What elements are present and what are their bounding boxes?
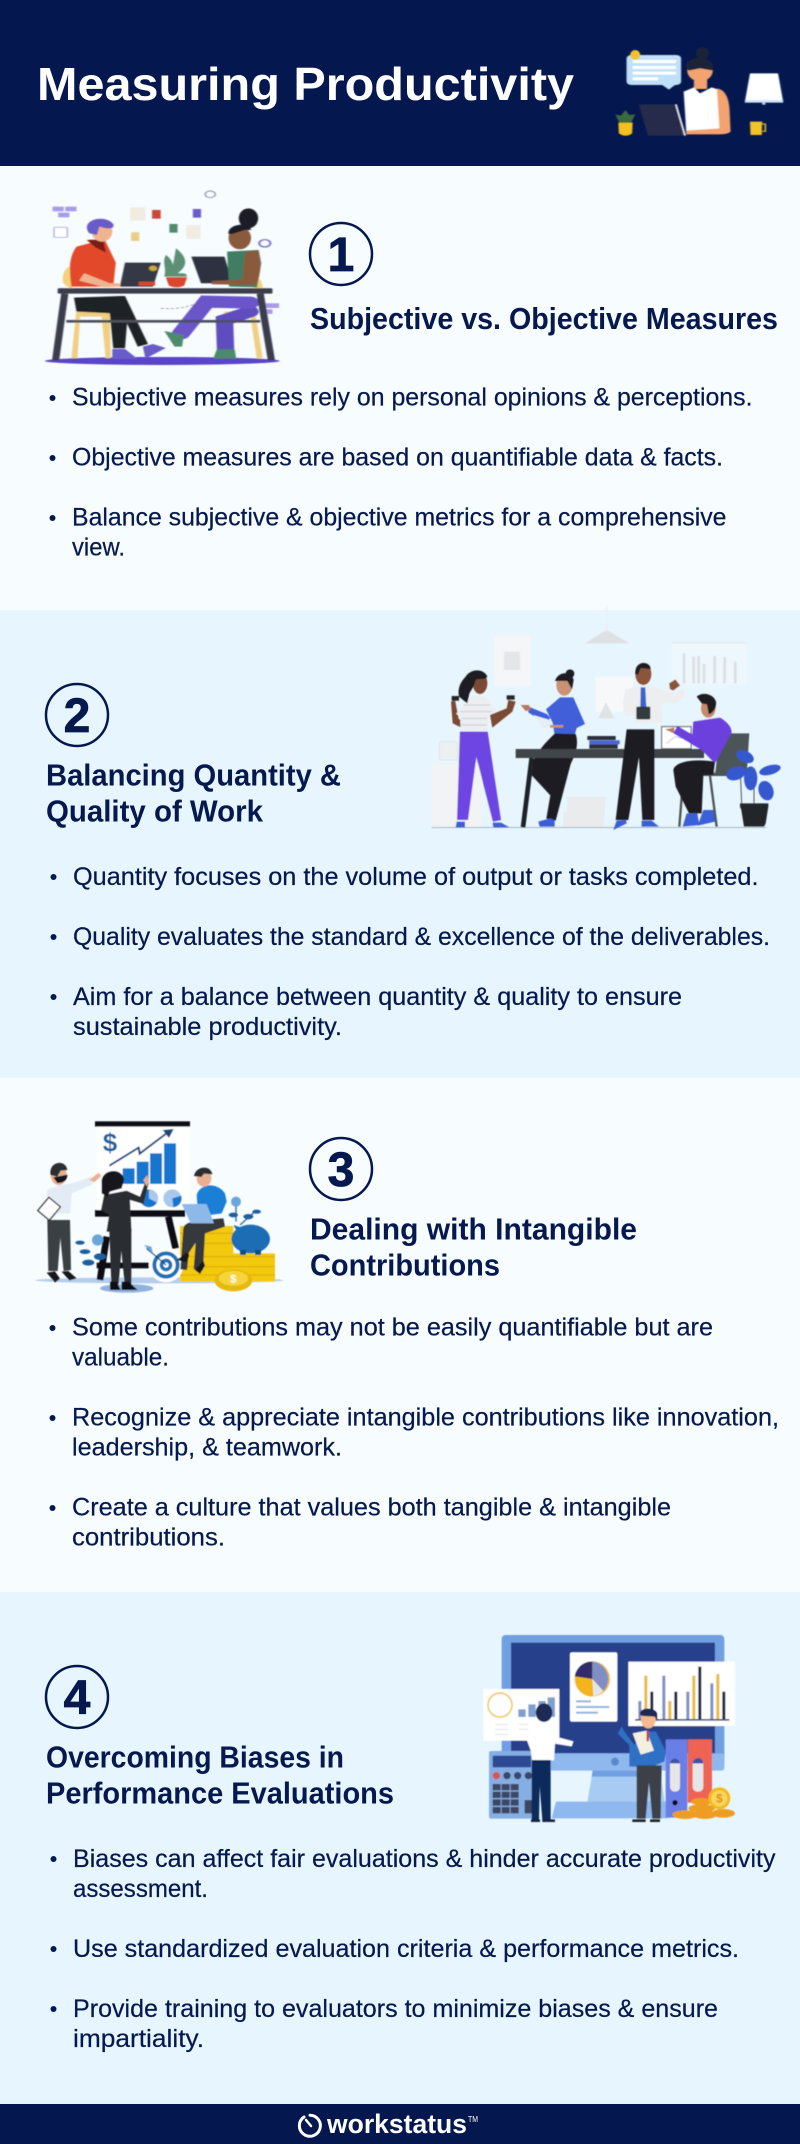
bullet list: section 4 <box>50 1845 776 2053</box>
bullet list: section 1: view. <box>72 534 125 562</box>
bullet list: section 4: Biases can affect fair evaluations & hinder accurate productivity <box>73 1845 776 1873</box>
icon: woman at laptop <box>615 47 783 136</box>
bullet list: section 2 <box>50 863 770 1041</box>
number badge 3 <box>310 1138 372 1200</box>
bullet list: section 2: Aim for a balance between quantity & quality to ensure <box>73 983 682 1011</box>
heading: section 4 <box>46 1740 394 1810</box>
illustration: team meeting around a table <box>432 605 782 830</box>
bullet list: section 2: sustainable productivity. <box>73 1013 342 1041</box>
illustration: analytics dashboard on a monitor: $ <box>716 1792 723 1806</box>
number badge 1 <box>310 223 372 285</box>
bullet list: section 2: Quantity focuses on the volume of output or tasks completed. <box>73 863 758 891</box>
bullet list: section 4: Use standardized evaluation criteria & performance metrics. <box>73 1935 739 1963</box>
panel: header banner <box>0 0 800 166</box>
panel: section 2 <box>0 605 800 1078</box>
heading: section 2 <box>46 758 341 828</box>
bullet list: section 3: Some contributions may not be easily quantifiable but are <box>72 1314 713 1342</box>
footer brand name: workstatus <box>326 2109 467 2139</box>
number badge 2 <box>46 684 108 746</box>
heading: section 2: Quality of Work <box>46 794 264 828</box>
illustration: business growth presentation: $ <box>103 1128 118 1158</box>
bullet list: section 3: valuable. <box>72 1344 169 1372</box>
bullet list: section 3: Recognize & appreciate intangible contributions like innovation, <box>72 1404 779 1432</box>
heading: section 3: Contributions <box>310 1248 500 1282</box>
heading: section 3 <box>310 1212 637 1282</box>
panel: section 4 <box>0 1592 800 2104</box>
trademark mark: TM <box>468 2115 478 2124</box>
bullet list: section 1 <box>50 384 752 562</box>
heading: section 4: Overcoming Biases in <box>46 1740 344 1774</box>
illustration: business growth presentation <box>35 1121 283 1293</box>
bullet list: section 3: Create a culture that values both tangible & intangible <box>72 1494 671 1522</box>
illustration: business growth presentation: $ <box>230 1274 237 1286</box>
panel: footer <box>0 2104 800 2144</box>
bullet list: section 4: Provide training to evaluators to minimize biases & ensure <box>73 1995 718 2023</box>
number badge 1: 1 <box>328 229 354 282</box>
bullet list: section 3: leadership, & teamwork. <box>72 1434 342 1462</box>
number badge 2: 2 <box>64 690 90 743</box>
bullet list: section 3 <box>50 1314 779 1552</box>
bullet list: section 1: Subjective measures rely on personal opinions & perceptions. <box>72 384 752 412</box>
panel: section 1 <box>0 166 800 610</box>
bullet list: section 2: Quality evaluates the standard & excellence of the deliverables. <box>73 923 770 951</box>
bullet list: section 1: Balance subjective & objective metrics for a comprehensive <box>72 504 726 532</box>
bullet list: section 4: impartiality. <box>73 2025 204 2053</box>
illustration: two people working at a desk <box>45 191 280 365</box>
number badge 4: 4 <box>64 1672 91 1725</box>
heading: section 2: Balancing Quantity & <box>46 758 341 792</box>
number badge 3: 3 <box>328 1144 354 1197</box>
heading: section 4: Performance Evaluations <box>46 1776 394 1810</box>
panel: section 3 <box>0 1078 800 1592</box>
title: Measuring Productivity <box>37 58 574 110</box>
number badge 4 <box>46 1666 108 1728</box>
bullet list: section 3: contributions. <box>72 1524 225 1552</box>
bullet list: section 4: assessment. <box>73 1875 208 1903</box>
bullet list: section 1: Objective measures are based on quantifiable data & facts. <box>72 444 723 472</box>
heading: section 3: Dealing with Intangible <box>310 1212 637 1246</box>
illustration: analytics dashboard on a monitor <box>483 1635 735 1822</box>
icon: workstatus logo timer <box>299 2115 320 2136</box>
